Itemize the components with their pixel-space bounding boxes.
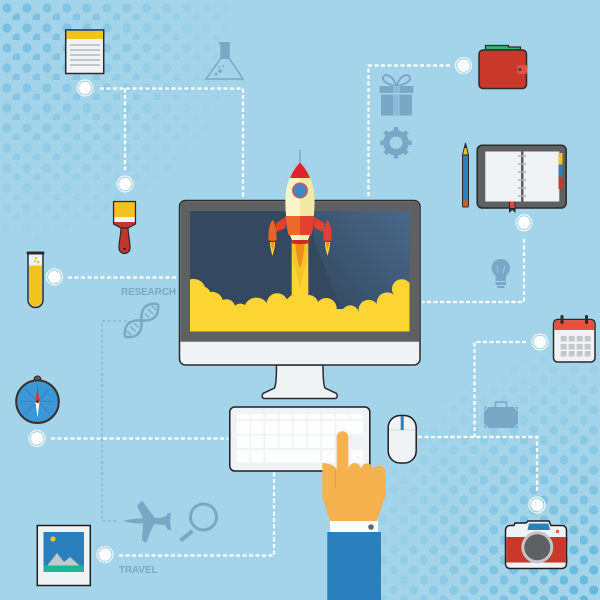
icon: airplane (123, 500, 171, 543)
icon: magnifier (180, 504, 216, 540)
icon: planner (477, 145, 566, 213)
icon: camera (506, 521, 566, 568)
shirt cuff (330, 521, 378, 532)
smoke clouds (190, 279, 410, 332)
icon: photo (37, 526, 90, 586)
icon: gift (380, 75, 414, 116)
monitor screen (190, 211, 410, 332)
icon: wallet (479, 46, 527, 88)
connector nodes (29, 58, 548, 562)
icon: briefcase (484, 402, 518, 428)
keyboard keys (237, 414, 363, 462)
finger joints (334, 470, 336, 488)
rocket (268, 150, 332, 256)
label: RESEARCH: RESEARCH (121, 287, 176, 298)
monitor bezel (180, 201, 419, 342)
connectors: white dotted lines (51, 66, 537, 556)
icon: calendar (554, 315, 595, 362)
hand with suit sleeve (322, 431, 386, 600)
label: TRAVEL: TRAVEL (119, 565, 157, 576)
monitor stand (262, 365, 337, 398)
sleeve (327, 532, 381, 600)
icon: test tube (26, 252, 44, 308)
thin connector: DNA to plane (102, 321, 127, 521)
icon: DNA helix (125, 304, 158, 337)
screen light beam (312, 211, 410, 332)
monitor body (180, 200, 420, 365)
mouse (388, 416, 416, 463)
keyboard (230, 407, 370, 471)
cuff button (368, 524, 374, 530)
hand (322, 431, 386, 521)
icon: gear (380, 127, 412, 158)
monitor (180, 150, 420, 398)
icon: light bulb (491, 259, 510, 288)
icon: notepad (66, 30, 104, 74)
icon: compass (16, 376, 59, 423)
icon: paintbrush (114, 202, 136, 254)
icon: pencil (462, 143, 468, 207)
rocket exhaust (292, 243, 308, 297)
icon: flask (206, 42, 243, 79)
